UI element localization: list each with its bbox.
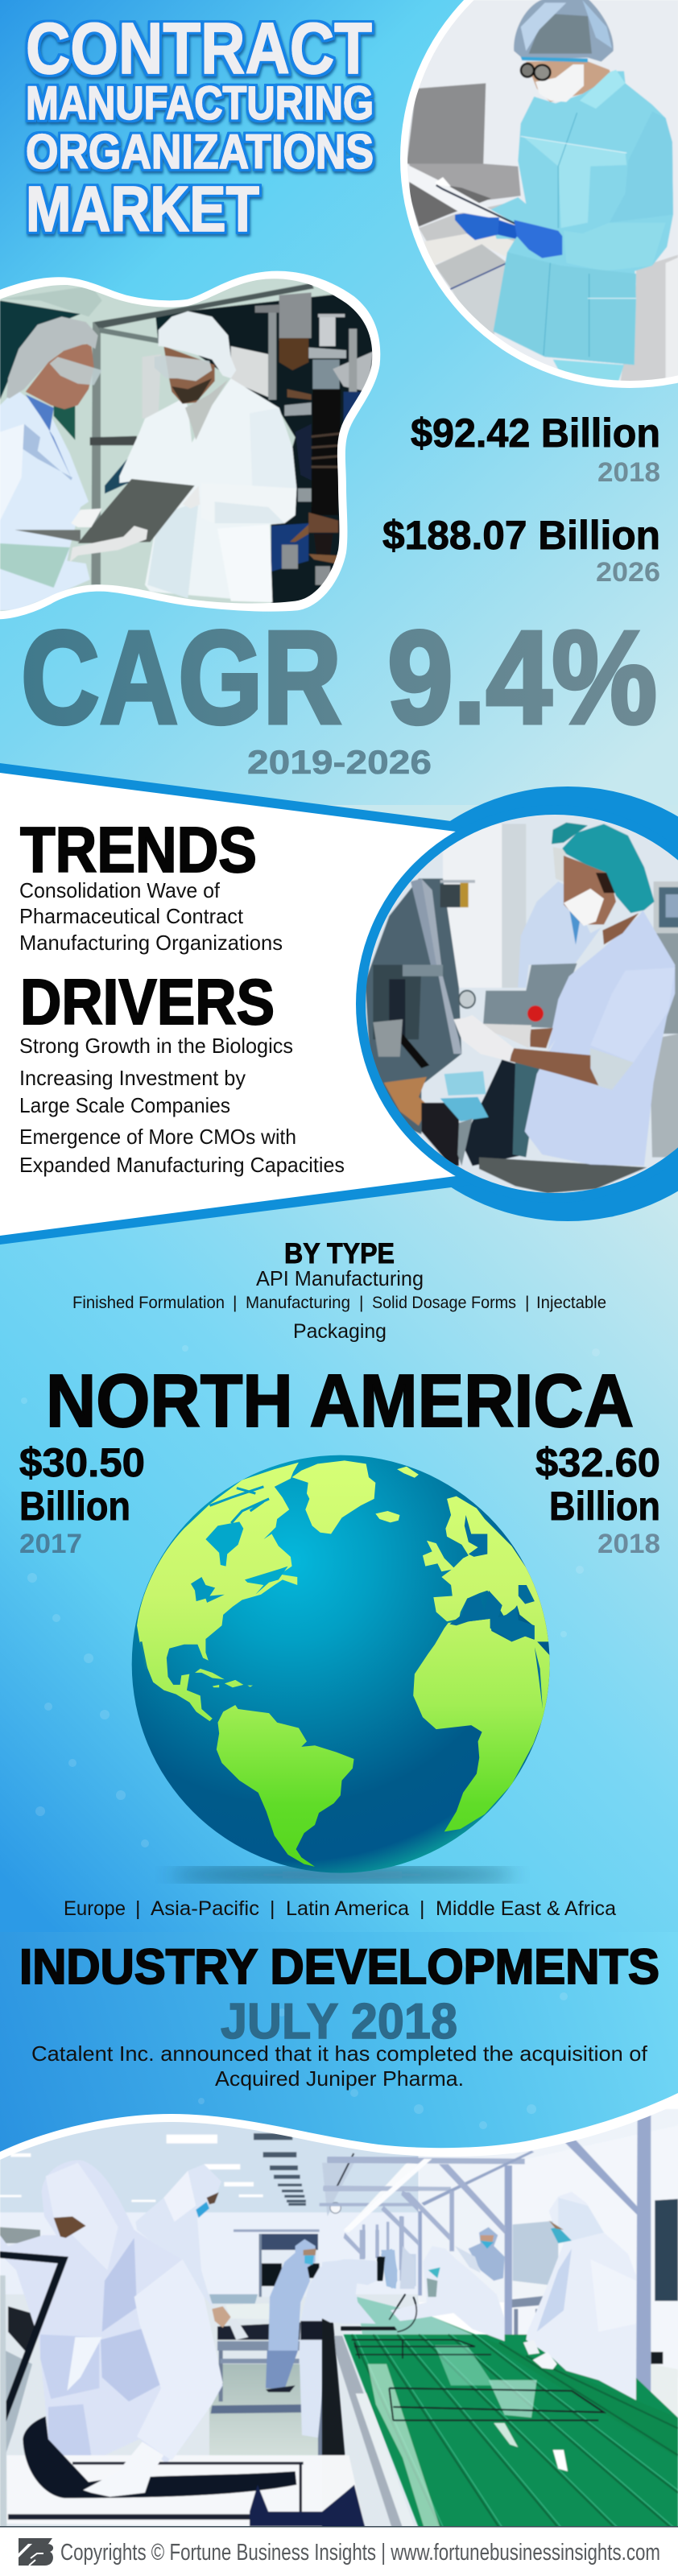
by type segment list: | <box>359 1294 363 1312</box>
gulf of california <box>141 1641 147 1669</box>
text block: drivers: Expanded Manufacturing Capacities <box>19 1153 345 1177</box>
background: top section gradient <box>0 0 678 805</box>
by type segment list: Manufacturing <box>246 1294 350 1312</box>
text block: trends: Consolidation Wave of <box>19 878 221 902</box>
by type segment list: BY TYPE <box>284 1238 395 1269</box>
uk and ireland <box>423 1541 455 1571</box>
photo: technician handling face masks <box>354 807 678 1206</box>
hudson bay <box>205 1521 243 1567</box>
title <box>26 9 374 245</box>
by type segment list: Solid Dosage Forms <box>372 1294 516 1312</box>
north america land <box>137 1463 299 1721</box>
market value 2018: 2018 <box>597 457 660 488</box>
north america value 2018: Billion <box>549 1484 660 1529</box>
gulf of st lawrence <box>245 1567 288 1595</box>
north america value 2017: $30.50 <box>19 1440 145 1485</box>
panel: trends and drivers white banner <box>0 763 678 1245</box>
other regions list: | <box>270 1897 275 1920</box>
background: industry developments gradient <box>0 1932 678 2222</box>
north america heading: NORTH AMERICA <box>46 1359 634 1443</box>
north america value 2018: 2018 <box>597 1529 660 1559</box>
cleanroom left half <box>0 2109 419 2528</box>
text block: trends <box>19 814 283 955</box>
red sea <box>535 1647 543 1709</box>
by type segment list: API Manufacturing <box>256 1266 424 1290</box>
title: MANUFACTURING <box>26 77 374 130</box>
text block: drivers: Strong Growth in the Biologics <box>19 1034 293 1058</box>
by type segment list: Packaging <box>293 1320 387 1343</box>
north america value 2017 <box>19 1440 145 1559</box>
africa <box>413 1619 552 1831</box>
caribbean islands <box>195 1669 253 1687</box>
CAGR period: 2019-2026 <box>247 743 432 781</box>
market value 2018 <box>411 411 660 488</box>
other regions list <box>64 1897 616 1920</box>
mediterranean <box>449 1591 535 1641</box>
development description: Catalent Inc. announced that it has completed the acquisition of <box>31 2041 648 2066</box>
market value 2018: $92.42 Billion <box>411 411 660 456</box>
other regions list: | <box>135 1897 140 1920</box>
icon: fortune business insights logo <box>19 2538 53 2566</box>
text block: trends: Manufacturing Organizations <box>19 931 283 955</box>
photo: two scientists with laptop in blob frame <box>0 271 381 620</box>
title: CONTRACT <box>26 9 372 89</box>
other regions list: Middle East & Africa <box>436 1897 616 1920</box>
CAGR headline: CAGR <box>21 604 341 751</box>
text block: drivers: Large Scale Companies <box>19 1093 230 1117</box>
text block: drivers: Emergence of More CMOs with <box>19 1125 296 1149</box>
by type segment list: Injectable <box>536 1294 606 1312</box>
black sea <box>519 1585 535 1604</box>
CAGR headline <box>21 604 657 751</box>
by type segment list: Finished Formulation <box>72 1294 225 1312</box>
greenland <box>292 1460 375 1534</box>
footer bar <box>0 2526 678 2576</box>
title: MARKET <box>26 173 259 245</box>
arctic channels <box>209 1487 269 1523</box>
iceland <box>375 1511 399 1522</box>
other regions list: | <box>420 1897 425 1920</box>
north america value 2018 <box>535 1440 660 1559</box>
other regions list: Asia-Pacific <box>151 1897 259 1920</box>
other regions list: Europe <box>64 1897 126 1920</box>
market value 2026: $188.07 Billion <box>382 513 660 558</box>
globe shadow <box>169 1868 515 1882</box>
market value 2026: 2026 <box>596 557 660 588</box>
text block: drivers: Increasing Investment by <box>19 1066 246 1090</box>
other regions list: Latin America <box>286 1897 409 1920</box>
baltic sea <box>465 1515 487 1557</box>
development date: JULY 2018 <box>221 1994 457 2050</box>
north america value 2017: 2017 <box>19 1529 82 1559</box>
by type segment list <box>72 1238 606 1343</box>
background: lower section gradient <box>0 805 678 1948</box>
by type segment list: | <box>525 1294 529 1312</box>
text block: drivers <box>19 966 345 1177</box>
market value 2026 <box>382 513 660 588</box>
photo: scientist in blue coat in circle <box>395 0 678 392</box>
text block: trends: TRENDS <box>20 814 257 886</box>
by type segment list: | <box>233 1294 237 1312</box>
text block: drivers: DRIVERS <box>20 966 275 1038</box>
south america <box>217 1705 354 1867</box>
industry developments heading: INDUSTRY DEVELOPMENTS <box>19 1939 659 1994</box>
development description <box>31 2041 648 2091</box>
text block: trends: Pharmaceutical Contract <box>19 904 244 928</box>
photo: cleanroom production line with wave frame <box>0 2093 678 2528</box>
cleanroom right half <box>322 2109 678 2528</box>
north america value 2018: $32.60 <box>535 1440 660 1485</box>
development description: Acquired Juniper Pharma. <box>215 2066 464 2091</box>
title: ORGANIZATIONS <box>26 125 374 179</box>
eurasia <box>433 1496 552 1641</box>
svalbard <box>397 1467 419 1478</box>
great lakes <box>191 1577 225 1603</box>
icon: globe <box>132 1455 552 1873</box>
north america value 2017: Billion <box>19 1484 130 1529</box>
